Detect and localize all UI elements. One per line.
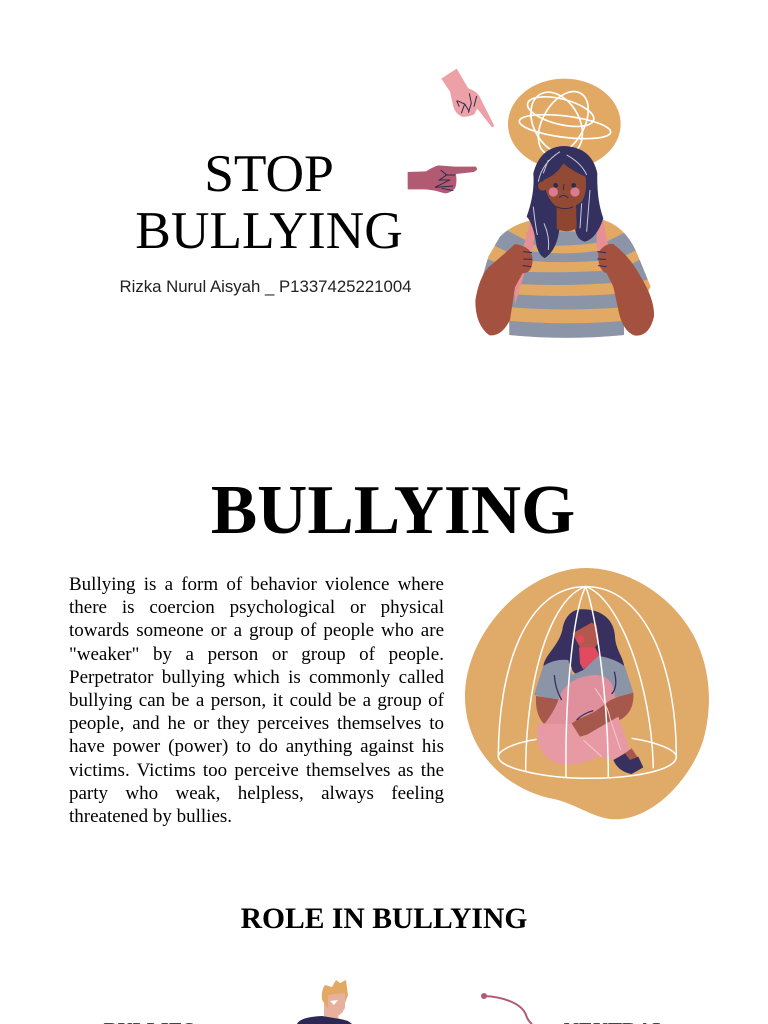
- title: stop bullying: [135, 143, 403, 260]
- illustration: bottom figure head: [297, 980, 352, 1024]
- text block: bullying definition: bullying can be a person, it could be a group of: [69, 690, 444, 711]
- text block: bullying definition: party who weak, helpless, always feeling: [69, 783, 444, 804]
- illustration: girl in cage: [465, 568, 709, 819]
- illustration: stressed girl with pointing hands: [408, 69, 657, 339]
- author line: Rizka Nurul Aisyah _ P1337425221004: [119, 277, 412, 296]
- neck: [557, 202, 577, 231]
- seated girl: [534, 609, 643, 774]
- text block: bullying definition: [69, 574, 444, 827]
- decorative curved line with dot: [481, 993, 532, 1024]
- title: stop bullying: BULLYING: [135, 200, 403, 260]
- arms and hands: [475, 244, 654, 336]
- wire cage: [498, 587, 676, 778]
- text block: bullying definition: Bullying is a form of behavior violence where: [69, 574, 444, 595]
- text block: bullying definition: threatened by bullies.: [69, 806, 232, 827]
- text block: bullying definition: Perpetrator bullying which is commonly called: [69, 667, 444, 688]
- text block: bullying definition: victims. Victims too perceive themselves as the: [69, 760, 444, 780]
- face: [533, 152, 590, 250]
- orange blob: [465, 568, 709, 819]
- text block: bullying definition: people, and he or they perceives themselves to: [69, 713, 444, 734]
- head circle with scribble: [508, 79, 621, 169]
- icon: pointing hand pink: [441, 69, 494, 127]
- heading: bullying: BULLYING: [211, 472, 575, 549]
- text block: bullying definition: there is coercion psychological or physical: [69, 597, 444, 618]
- text block: bullying definition: towards someone or a group of people who are: [69, 620, 444, 641]
- icon: pointing hand mauve: [408, 165, 477, 193]
- heading: role in bullying: ROLE IN BULLYING: [241, 903, 527, 935]
- text block: bullying definition: "weaker" by a person or group of people.: [69, 644, 444, 665]
- title: stop bullying: STOP: [204, 143, 334, 203]
- backpack straps: [514, 218, 615, 305]
- hair: [527, 146, 603, 258]
- shirt: [477, 220, 657, 339]
- text block: bullying definition: have power (power) to do anything against his: [69, 736, 444, 757]
